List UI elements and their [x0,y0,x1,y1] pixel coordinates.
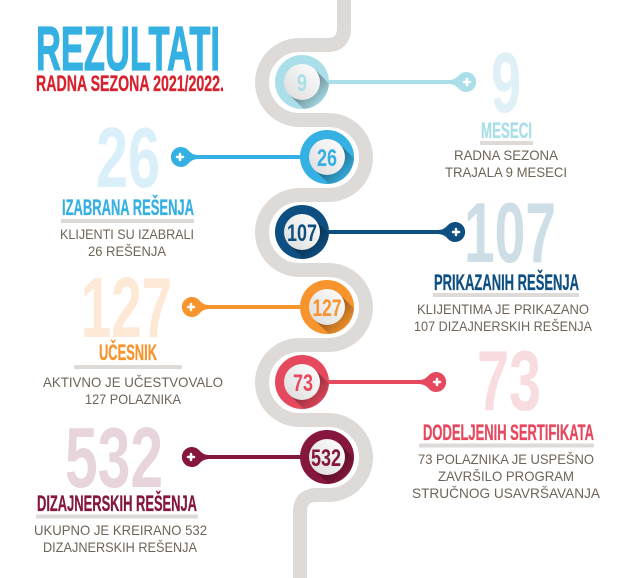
subtitle: RADNA SEZONA 2021/2022. [36,71,224,96]
badge [275,355,329,409]
title: REZULTATI [36,15,220,84]
description: 26 REŠENJA [88,243,167,259]
big number: 107 [464,186,556,281]
badge: 26 [317,145,337,172]
big number: 26 [96,111,160,206]
connector [182,297,304,317]
milestone: 127 ucesnik [43,277,354,404]
description: 107 DIZAJNERSKIH REŠENJA [414,318,593,334]
description: AKTIVNO JE UČESTVOVALO [43,374,223,390]
description: DIZAJNERSKIH REŠENJA [43,539,198,555]
title [36,15,224,96]
milestone: 107 prikazanih resenja [275,202,592,331]
description: UKUPNO JE KREIRANO 532 [34,522,207,538]
big number: 532 [65,411,163,506]
heading: UČESNIK [99,340,157,365]
connector [171,147,304,167]
big number: 127 [81,261,172,356]
connector [182,447,304,467]
badge: 107 [287,220,317,247]
description: STRUČNOG USAVRŠAVANJA [412,485,601,501]
connector [325,372,446,392]
milestone: 26 izabrana resenja [61,127,354,256]
badge [300,280,354,334]
milestone: 73 dodeljenih sertifikata [275,350,600,498]
badge [300,130,354,184]
milestone: 532 dizajnerskih resenja [35,427,354,552]
connector [325,72,476,92]
description: TRAJALA 9 MESECI [445,164,567,180]
big number: 9 [491,36,521,131]
description: KLIJENTI SU IZABRALI [60,226,194,242]
badge: 73 [293,370,313,397]
heading: MESECI [481,118,532,143]
description: 73 POLAZNIKA JE USPEŠNO [418,451,594,467]
description: RADNA SEZONA [454,147,559,163]
badge: 127 [312,295,342,322]
badge [275,205,329,259]
badge [300,430,354,484]
description: 127 POLAZNIKA [85,391,182,407]
badge [275,55,329,109]
badge: 532 [311,445,341,472]
heading: IZABRANA REŠENJA [62,195,194,220]
big number: 73 [477,334,541,429]
description: ZAVRŠILO PROGRAM [438,468,574,484]
winding road [262,0,366,578]
connector [325,222,465,242]
milestone: 9 meseci [275,52,566,177]
badge: 9 [297,70,307,97]
description: KLIJENTIMA JE PRIKAZANO [417,301,589,317]
heading: DIZAJNERSKIH REŠENJA [37,491,197,516]
